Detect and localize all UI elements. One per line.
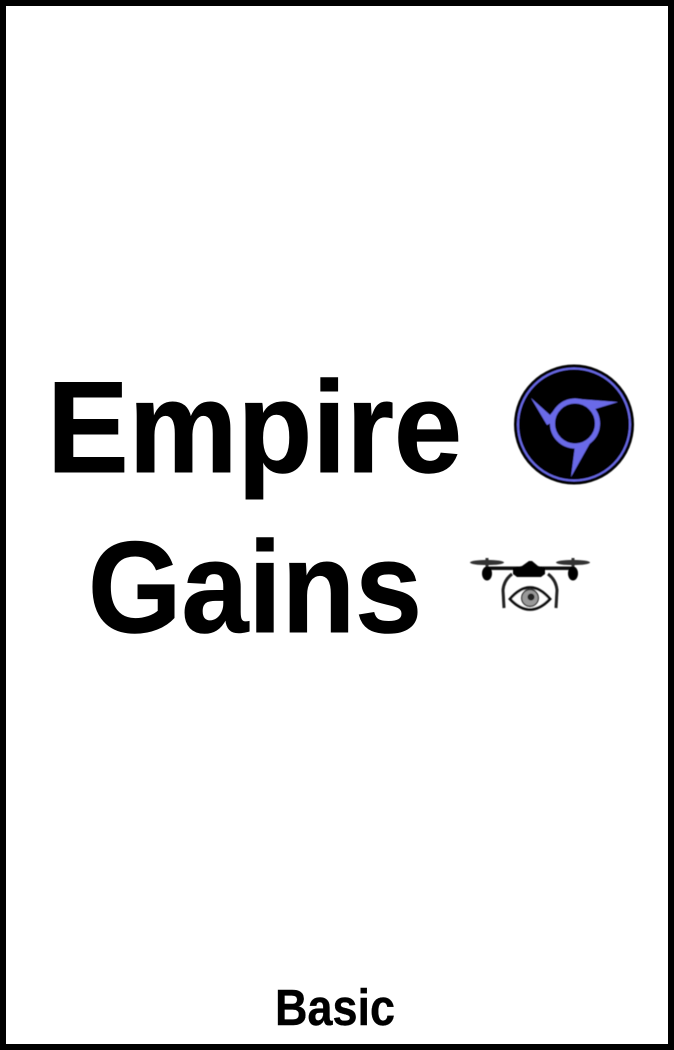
drone body: [513, 561, 545, 577]
drone propellers: [470, 558, 590, 568]
drone arm: [487, 566, 573, 570]
title: Gains: Gains: [88, 514, 422, 660]
icon: blue chrome-style circle logo: [514, 364, 634, 484]
label: Basic: Basic: [275, 979, 395, 1036]
icon: drone with eye: [470, 558, 590, 610]
drone legs: [503, 574, 557, 608]
title: Empire: Empire: [47, 354, 462, 500]
eye: [510, 588, 550, 610]
drone motors: [482, 566, 492, 580]
